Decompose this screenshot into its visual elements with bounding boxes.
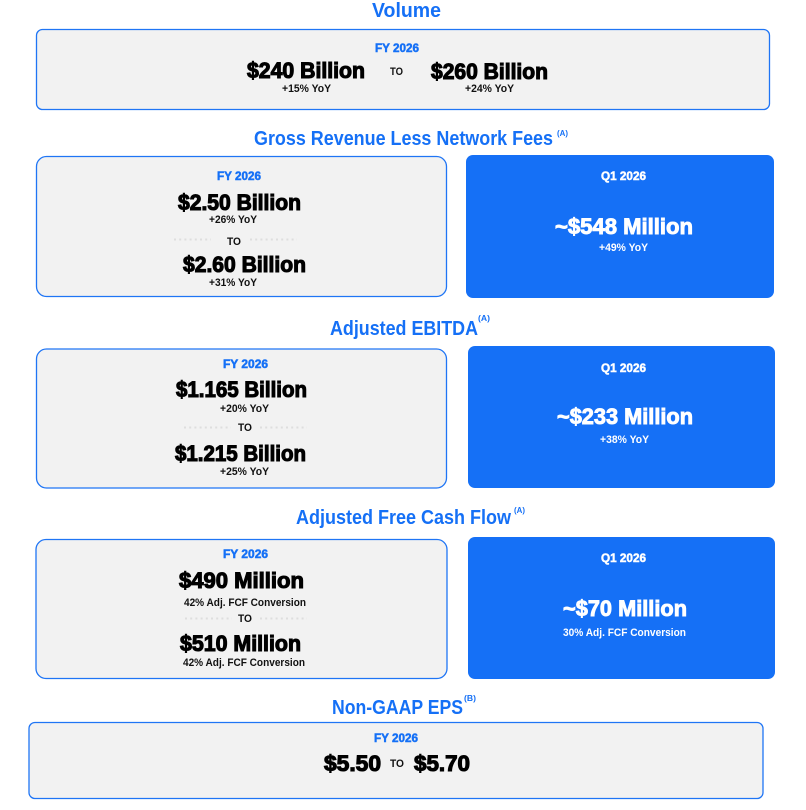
panel: Adjusted Free Cash Flow FY 2026 <box>36 540 447 678</box>
growth: +49% YoY <box>599 242 649 254</box>
high conversion: 42% Adj. FCF Conversion <box>183 657 305 669</box>
value: ~$548 Million <box>555 214 693 239</box>
range word: TO <box>390 758 404 770</box>
high value: $1.215 Billion <box>175 441 306 466</box>
range divider <box>184 422 307 434</box>
heading: Adjusted EBITDA: (A) <box>478 313 490 323</box>
low value: $1.165 Billion <box>176 377 307 402</box>
range divider: TO <box>227 236 241 248</box>
heading: Adjusted Free Cash Flow: Adjusted Free Cash Flow <box>296 507 511 529</box>
high growth: +31% YoY <box>209 277 258 289</box>
panel: Volume FY 2026 <box>36 30 770 110</box>
range divider: TO <box>238 422 252 434</box>
heading: Non-GAAP EPS: (B) <box>464 693 476 703</box>
low value: $240 Billion <box>247 58 365 83</box>
conversion: 30% Adj. FCF Conversion <box>563 627 686 639</box>
high growth: +24% YoY <box>465 83 515 95</box>
value: ~$70 Million <box>563 596 687 621</box>
heading: Non-GAAP EPS: Non-GAAP EPS <box>332 697 463 719</box>
panel: Adjusted EBITDA FY 2026 <box>36 349 446 488</box>
period label: Q1 2026 <box>601 169 646 183</box>
low value: $5.50 <box>324 751 381 776</box>
heading: Volume: Volume <box>372 0 441 22</box>
growth: +38% YoY <box>600 434 650 446</box>
low growth: +26% YoY <box>209 214 258 226</box>
range divider <box>185 613 307 625</box>
heading: Adjusted Free Cash Flow: (A) <box>514 505 525 515</box>
low value: $2.50 Billion <box>178 190 301 215</box>
value: ~$233 Million <box>557 404 693 429</box>
period label: FY 2026 <box>223 547 268 561</box>
period label: FY 2026 <box>217 169 261 183</box>
range word: TO <box>390 66 403 78</box>
low growth: +20% YoY <box>220 403 270 415</box>
high value: $510 Million <box>180 631 301 656</box>
high growth: +25% YoY <box>220 466 270 478</box>
low value: $490 Million <box>179 568 304 593</box>
period label: Q1 2026 <box>601 361 646 375</box>
panel: Adjusted EBITDA Q1 2026 <box>468 346 775 488</box>
range divider: TO <box>238 613 252 625</box>
period label: FY 2026 <box>375 41 419 55</box>
panel: Adjusted Free Cash Flow Q1 2026 <box>468 537 775 679</box>
heading: Gross Revenue Less Network Fees: Gross Revenue Less Network Fees <box>254 128 553 150</box>
high value: $5.70 <box>414 751 470 776</box>
high value: $2.60 Billion <box>183 252 306 277</box>
panel: Non-GAAP EPS FY 2026 <box>29 722 763 798</box>
period label: FY 2026 <box>223 357 268 371</box>
panel: Gross Revenue Q1 2026 <box>466 155 774 298</box>
panel: Gross Revenue FY 2026 <box>36 156 446 296</box>
period label: FY 2026 <box>374 731 418 745</box>
heading: Gross Revenue Less Network Fees: (A) <box>557 128 568 138</box>
range divider <box>174 236 297 248</box>
heading: Adjusted EBITDA: Adjusted EBITDA <box>330 318 478 340</box>
high value: $260 Billion <box>431 59 548 84</box>
low growth: +15% YoY <box>282 83 332 95</box>
low conversion: 42% Adj. FCF Conversion <box>184 597 306 609</box>
period label: Q1 2026 <box>601 551 646 565</box>
